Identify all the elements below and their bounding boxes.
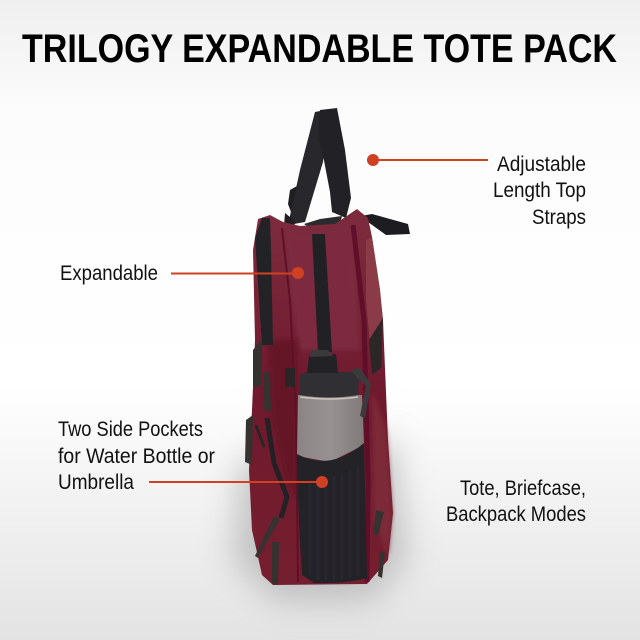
callout: adjustable length top straps [367, 153, 586, 229]
pointer [149, 476, 328, 488]
left black strip [255, 218, 273, 345]
dark panel left of bottle [268, 340, 298, 500]
label: for Water Bottle or [58, 445, 215, 468]
bag shadow [232, 440, 408, 602]
bag dark seams [282, 228, 298, 582]
top strap handles [284, 108, 410, 235]
centre black zip strip [312, 234, 332, 352]
label: Two Side Pockets [58, 418, 203, 441]
label: Straps [532, 206, 586, 229]
pointer [171, 267, 304, 279]
label: Length Top [493, 179, 586, 202]
zipper pull tabs [245, 338, 385, 585]
side zipper [267, 418, 287, 518]
label: tote, briefcase, backpack modes: Tote, Briefcase, [460, 477, 586, 500]
callout: two side pockets [58, 418, 328, 494]
black corner patch [369, 318, 383, 375]
bag body [249, 209, 393, 585]
label: Adjustable [497, 153, 586, 176]
upper panel shading [285, 222, 360, 350]
label: Expandable [60, 262, 158, 285]
mesh side pocket [297, 443, 367, 583]
callout: expandable [60, 262, 304, 285]
product: tote pack side view with water bottle [232, 108, 410, 602]
label: tote, briefcase, backpack modes: Backpack Modes [446, 503, 586, 526]
label: Umbrella [58, 471, 134, 494]
pointer [367, 154, 488, 166]
water bottle [297, 350, 371, 462]
black square patch [285, 368, 295, 387]
